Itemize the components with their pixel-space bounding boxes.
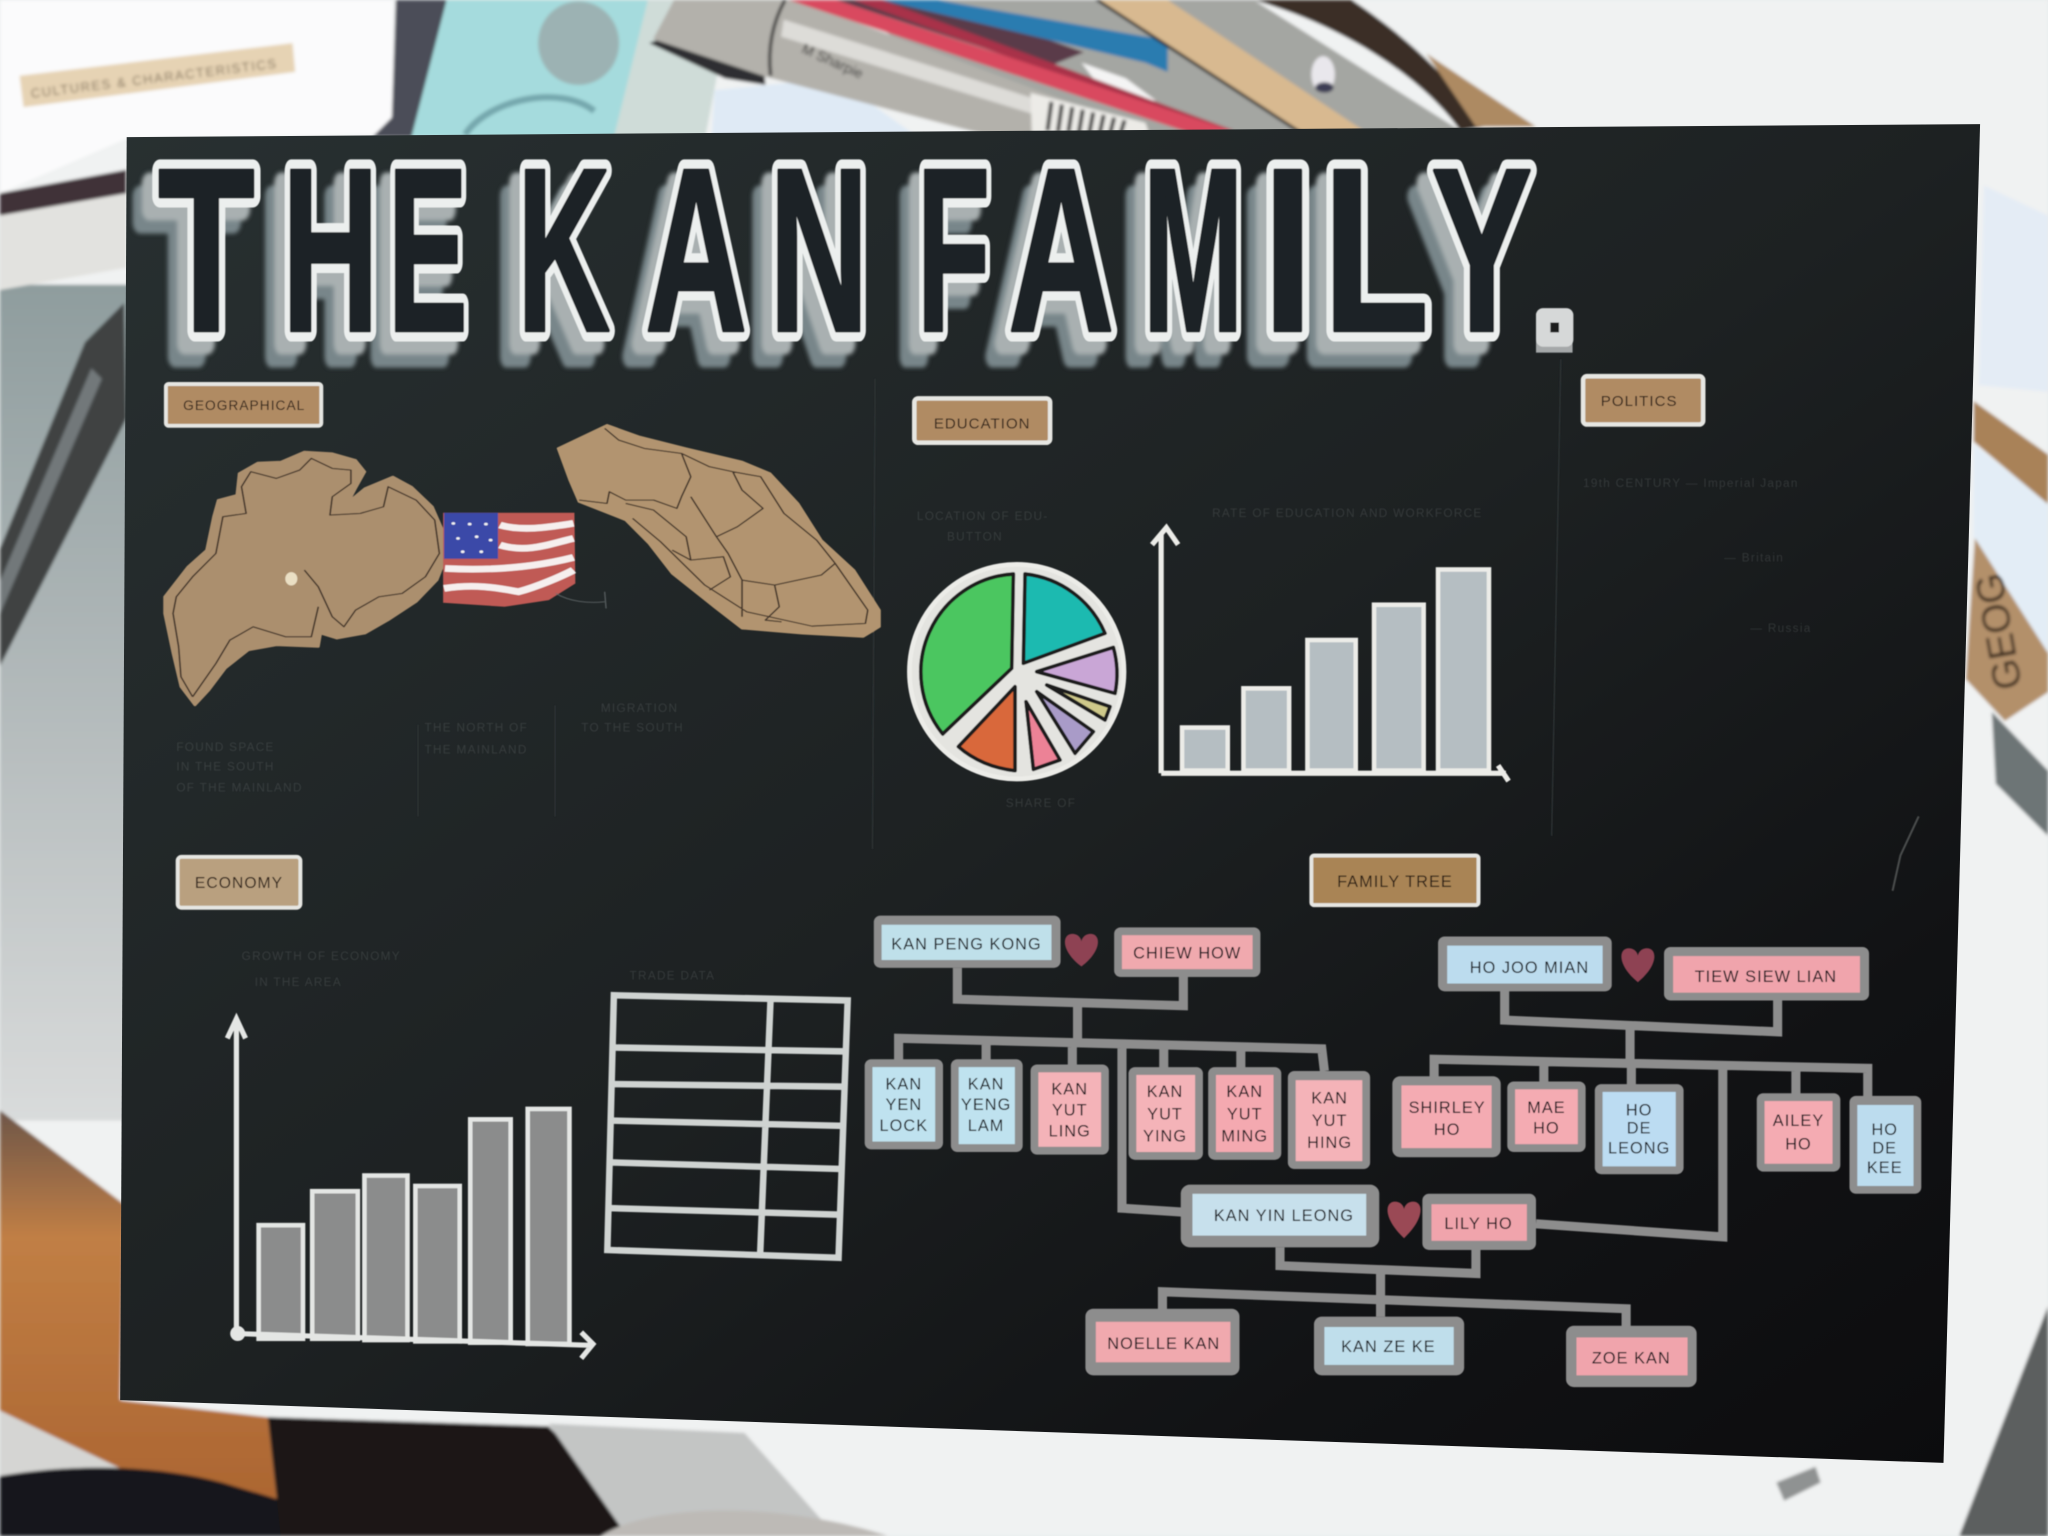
title dark letter interiors: H (282, 121, 379, 380)
title shadow far: F (897, 148, 970, 407)
title white outline layer (158, 121, 1532, 380)
title white outline layer: A (645, 121, 747, 380)
person: Kan Yut Ying (1128, 1067, 1203, 1160)
pie slice: khaki (1047, 685, 1110, 720)
person: Ho Joo Mian (1438, 936, 1612, 991)
person: Kan Yut Ling (1031, 1064, 1109, 1155)
person: Kan Yen Lock: KAN (885, 1075, 922, 1093)
person: Kan Yut Hing: YUT (1312, 1112, 1348, 1130)
person: Mae Ho (1507, 1081, 1586, 1152)
faint pencil guide lines and notes: BUTTON (947, 531, 1003, 544)
title white outline layer: A (1008, 121, 1114, 380)
title dark letter interiors: A (1008, 121, 1114, 380)
pie slice: green (921, 574, 1013, 734)
title shadow far: N (750, 148, 849, 407)
person: Kan Yut Ming: KAN (1226, 1083, 1263, 1101)
title shadow near: A (998, 135, 1104, 394)
cardboard ribbon (1254, 0, 1484, 131)
person: Kan Yen Lock: YEN (885, 1096, 922, 1114)
title shadow far: Y (1412, 148, 1512, 407)
person: Mae Ho: HO (1533, 1120, 1560, 1138)
title shadow near: T (148, 135, 244, 394)
person: Lily Ho (1422, 1194, 1536, 1250)
heading: Geographical: GEOGRAPHICAL (183, 398, 305, 413)
title white outline layer: Y (1432, 121, 1532, 380)
person: Ho De Kee: DE (1872, 1139, 1897, 1157)
faint pencil guide lines and notes: — Britain (1724, 552, 1784, 565)
person: Kan Yin Leong (1181, 1185, 1379, 1247)
faint pencil guide lines and notes: LOCATION OF EDU- (917, 510, 1049, 523)
pie slice: purple (1037, 692, 1093, 753)
person: Ho De Leong: DE (1627, 1120, 1652, 1138)
title dark letter interiors: M (1143, 121, 1243, 380)
person: Ho De Kee (1849, 1096, 1921, 1194)
person: Noelle Kan (1085, 1309, 1240, 1375)
title shadow near: K (507, 135, 600, 394)
person: Kan Yut Hing: KAN (1311, 1090, 1348, 1108)
title white outline layer: F (917, 121, 990, 380)
faint pencil guide lines and notes: IN THE AREA (255, 976, 342, 989)
grey desk (836, 0, 1460, 135)
title shadow near (148, 135, 1522, 394)
title dark letter interiors: E (388, 121, 468, 380)
title shadow near: H (272, 135, 368, 394)
faint pencil guide lines and notes (176, 359, 1919, 989)
title white outline layer: T (158, 121, 255, 380)
title shadow far: H (263, 148, 359, 407)
faint pencil guide lines and notes: THE MAINLAND (424, 744, 528, 757)
faint pencil guide lines and notes: 19th CENTURY — Imperial Japan (1583, 477, 1799, 490)
title dark letter interiors (158, 121, 1532, 380)
title dark letter interiors: T (158, 121, 255, 380)
person: Kan Yut Ying: KAN (1147, 1083, 1183, 1101)
person: Kan Yeng Lam: YENG (961, 1096, 1011, 1114)
title: THE KAN FAMILY. (138, 121, 1577, 407)
heading: Economy: ECONOMY (195, 875, 283, 892)
title white outline layer: M (1143, 121, 1243, 380)
heading: Education (914, 398, 1050, 443)
heading: Geographical (166, 384, 321, 426)
title white outline layer: I (1263, 121, 1313, 380)
person: Mae Ho: MAE (1527, 1099, 1566, 1117)
person: Kan Yut Ying: YING (1143, 1128, 1187, 1146)
pie chart (909, 564, 1124, 779)
title dark letter interiors: Y (1432, 121, 1532, 380)
person: Kan Yut Ling: LING (1049, 1122, 1091, 1140)
teal ruler (411, 0, 705, 137)
faint pencil guide lines and notes: IN THE SOUTH (176, 761, 275, 774)
title shadow near: Y (1421, 135, 1522, 394)
tablet (0, 0, 393, 193)
person: Kan Yut Ling: YUT (1052, 1101, 1088, 1119)
US flag (443, 513, 606, 608)
title shadow near: F (906, 135, 980, 394)
heading: Family Tree (1311, 856, 1479, 905)
title shadow far: I (1243, 148, 1293, 407)
title shadow near: E (377, 135, 457, 394)
tree connector lines (899, 968, 1868, 1327)
person: Shirley Ho (1392, 1076, 1501, 1157)
person: Kan Yut Ying: YUT (1147, 1105, 1183, 1123)
faint pencil guide lines and notes: MIGRATION (601, 702, 678, 715)
faint pencil guide lines and notes: THE NORTH OF (424, 721, 528, 734)
person: Kan Peng Kong: KAN PENG KONG (891, 936, 1042, 954)
title dark letter interiors: I (1263, 121, 1313, 380)
person: Kan Yut Hing: HING (1307, 1134, 1352, 1152)
title shadow far: A (626, 148, 728, 407)
person: Zoe Kan: ZOE KAN (1592, 1350, 1671, 1368)
person: Kan Yut Ming (1208, 1067, 1281, 1160)
heading: Economy (178, 857, 300, 908)
family tree (865, 916, 1921, 1387)
title dark letter interiors: F (917, 121, 990, 380)
person: Noelle Kan: NOELLE KAN (1107, 1335, 1220, 1353)
person: Ailey Ho: AILEY (1773, 1112, 1824, 1130)
faint pencil guide lines and notes: FOUND SPACE (176, 741, 275, 754)
pie slice: pink (1026, 702, 1060, 769)
faint pencil guide lines and notes: — Russia (1750, 622, 1812, 635)
title shadow far: E (368, 148, 448, 407)
heart (1065, 934, 1098, 967)
title dark letter interiors: K (517, 121, 610, 380)
red pencils (853, 0, 1234, 131)
person: Kan Yin Leong: KAN YIN LEONG (1214, 1207, 1354, 1225)
faint pencil guide lines and notes: OF THE MAINLAND (176, 782, 303, 795)
faint pencil guide lines and notes: TO THE SOUTH (581, 721, 684, 734)
title shadow near: A (635, 135, 737, 394)
title shadow far: K (498, 148, 590, 407)
person: Kan Ze Ke: KAN ZE KE (1341, 1338, 1436, 1356)
title white outline layer: K (517, 121, 610, 380)
heading: Politics: POLITICS (1601, 393, 1678, 410)
pie slice: teal (1023, 574, 1105, 663)
title shadow near: N (759, 135, 858, 394)
economy data table (607, 995, 848, 1258)
pie slice: lilac (1037, 647, 1117, 693)
person: Tiew Siew Lian (1664, 947, 1869, 1000)
person: Shirley Ho: SHIRLEY (1409, 1099, 1486, 1117)
faint pencil guide lines and notes: GROWTH OF ECONOMY (242, 950, 401, 963)
person: Shirley Ho: HO (1434, 1121, 1460, 1139)
person: Ho Joo Mian: HO JOO MIAN (1470, 959, 1589, 977)
title white outline layer: N (769, 121, 869, 380)
silver marker pen (649, 39, 765, 85)
title white outline layer: H (282, 121, 379, 380)
person: Kan Yeng Lam (951, 1059, 1023, 1152)
title dark letter interiors: N (769, 121, 869, 380)
heading: Politics (1583, 376, 1703, 424)
person: Ho De Kee: HO (1871, 1121, 1898, 1139)
person: Kan Yut Hing (1288, 1071, 1370, 1169)
person: Kan Yen Lock (865, 1059, 943, 1149)
title shadow near: M (1132, 135, 1233, 394)
economy bar chart (227, 1019, 593, 1358)
person: Ho De Leong: HO (1626, 1101, 1652, 1119)
person: Ailey Ho (1757, 1093, 1840, 1172)
desk background with stationery: CULTURES & CHARACTERISTICS (30, 56, 278, 101)
title shadow far: M (1123, 148, 1224, 407)
title shadow near: I (1253, 135, 1302, 394)
black poster board (120, 124, 1980, 1463)
person: Chiew How: CHIEW HOW (1133, 945, 1241, 963)
heading: Family Tree: FAMILY TREE (1337, 873, 1453, 891)
person: Ho De Leong: LEONG (1608, 1139, 1670, 1157)
title shadow far: T (138, 148, 235, 407)
tan stick (1095, 0, 1309, 135)
person: Kan Peng Kong (874, 916, 1061, 968)
person: Kan Yut Ming: MING (1221, 1128, 1268, 1146)
title dark letter interiors: L (1323, 121, 1429, 380)
person: Kan Yut Ling: KAN (1051, 1081, 1088, 1099)
person: Lily Ho: LILY HO (1444, 1215, 1513, 1233)
person: Kan Yen Lock: LOCK (880, 1117, 928, 1135)
title shadow far: A (989, 148, 1095, 407)
person: Tiew Siew Lian: TIEW SIEW LIAN (1695, 968, 1837, 986)
heart (1621, 948, 1654, 982)
title shadow far (138, 148, 1512, 407)
faint pencil guide lines and notes: TRADE DATA (630, 970, 715, 983)
person: Chiew How (1114, 927, 1260, 977)
title period: . (1532, 192, 1577, 375)
title dark letter interiors: A (645, 121, 747, 380)
blue pencil with dark-red shadow (836, 0, 1084, 68)
desk background with stationery: GEOG (1968, 570, 2031, 693)
person: Zoe Kan (1566, 1326, 1697, 1387)
person: Ailey Ho: HO (1785, 1135, 1812, 1153)
person: Ho De Leong (1595, 1084, 1684, 1174)
barcode (1031, 93, 1149, 135)
heart (1388, 1202, 1421, 1238)
person: Kan Yeng Lam: KAN (968, 1075, 1004, 1093)
heading: Education: EDUCATION (934, 415, 1031, 432)
person: Ho De Kee: KEE (1867, 1159, 1903, 1177)
person: Kan Yeng Lam: LAM (968, 1117, 1004, 1135)
title shadow far: L (1304, 148, 1409, 407)
education bar chart (1152, 528, 1509, 781)
title white outline layer: E (388, 121, 468, 380)
faint pencil guide lines and notes: RATE OF EDUCATION AND WORKFORCE (1212, 507, 1483, 520)
faint pencil guide lines and notes: SHARE OF (1006, 797, 1076, 810)
person: Kan Ze Ke (1314, 1317, 1464, 1375)
title white outline layer: L (1323, 121, 1429, 380)
desk background with stationery: M Sharpie (799, 41, 865, 83)
map cutout: right region (558, 425, 879, 637)
pie slice: orange (958, 687, 1015, 771)
title shadow near: L (1313, 135, 1418, 394)
map cutout: left region (165, 452, 445, 705)
person: Kan Yut Ming: YUT (1227, 1105, 1263, 1123)
